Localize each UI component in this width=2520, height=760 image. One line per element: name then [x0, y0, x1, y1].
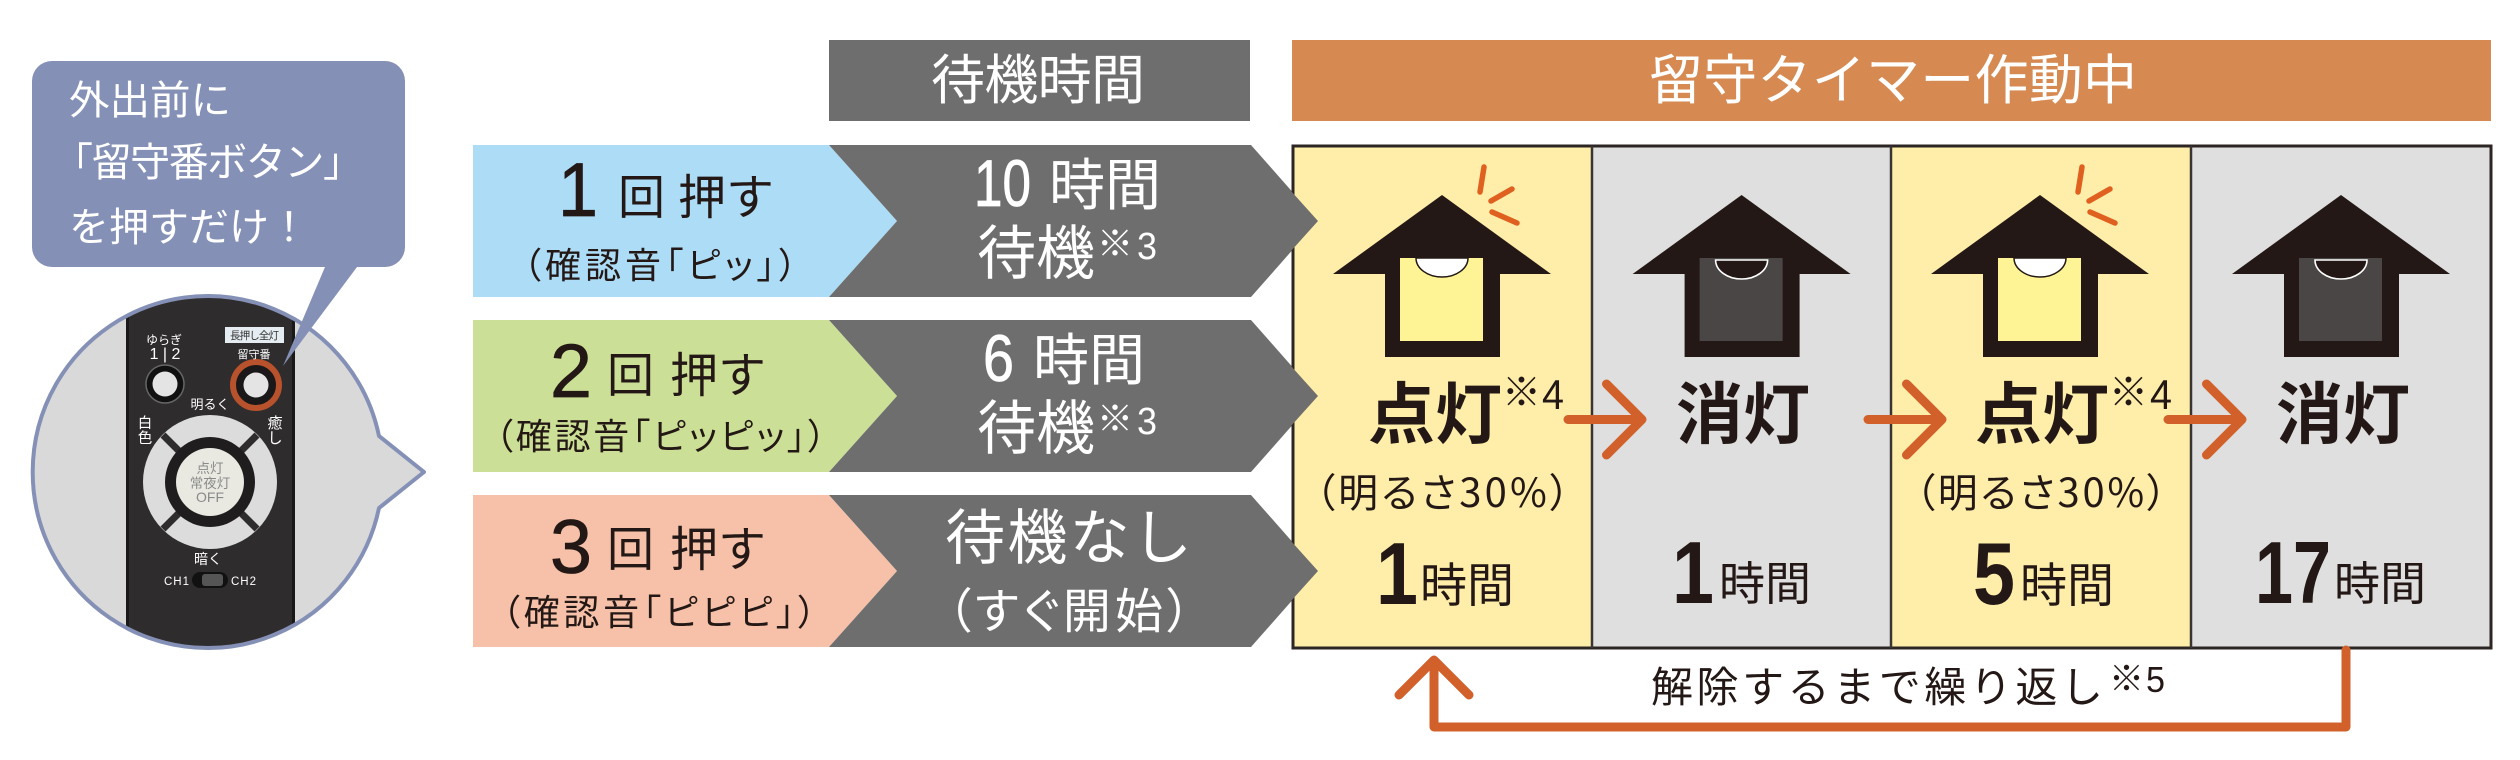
- step 4: light off 17 hours: 時間: [2334, 548, 2426, 614]
- arrow: 10 hour standby: 3: [1137, 226, 1157, 268]
- row 2: press twice: 押す: [670, 336, 766, 406]
- header: standby time: [829, 36, 1250, 121]
- label: long-press tag: 長押し全灯: [230, 328, 280, 343]
- step 3: light on 5 hours: 5: [1973, 524, 2015, 623]
- icon: direction pad: OFF: [196, 489, 224, 505]
- remote control labels: CH2: [231, 576, 257, 588]
- header: standby time: 待機時間: [931, 36, 1145, 115]
- icon: direction pad: [143, 415, 277, 549]
- text: repeats until cancelled: 解除するまで繰り返し: [1651, 654, 2103, 715]
- arrow: 10 hour standby: 待機: [977, 206, 1095, 291]
- callout: press the away button: 外出前に: [69, 68, 231, 126]
- step 1: light on 1 hour: 4: [1542, 371, 1564, 418]
- icon: dark house: [1633, 195, 1851, 357]
- arrow: step 3 to 4: [2168, 384, 2242, 455]
- arrow: 6 hour standby: ※: [1097, 390, 1133, 442]
- remote control labels: し: [267, 427, 283, 448]
- icon: yuragi button: [146, 365, 184, 403]
- remote control labels: 白: [138, 412, 152, 433]
- step 4: light off 17 hours: 消灯: [2276, 361, 2410, 458]
- row 1: press once: 1: [558, 148, 598, 233]
- arrow: no standby: （すぐ開始）: [947, 572, 1191, 642]
- icon: lit house: [1931, 167, 2149, 357]
- callout: press the away button: 「留守番ボタン」: [53, 130, 363, 188]
- remote control: [126, 290, 295, 655]
- step 2: light off 1 hour: 1: [1672, 523, 1714, 622]
- callout: press the away button: を押すだけ！: [69, 195, 309, 253]
- remote control labels: 癒: [267, 412, 283, 433]
- step 2: light off 1 hour: [1633, 195, 1851, 622]
- step 1: light on 1 hour: [1315, 167, 1570, 623]
- remote control labels: ゆらぎ: [146, 331, 182, 348]
- row 2: press twice: [473, 320, 897, 472]
- header: timer running: 留守タイマー作動中: [1649, 36, 2137, 115]
- header: timer running: [1292, 36, 2491, 121]
- arrow: 10 hour standby: 時間: [1049, 141, 1161, 222]
- step 1: light on 1 hour: 1: [1376, 524, 1418, 623]
- step 2: light off 1 hour: 時間: [1719, 548, 1811, 614]
- row 3: press three times: 押す: [670, 510, 766, 580]
- row 3: press three times: （確認音「ピピピ」）: [502, 584, 816, 636]
- remote control labels: 明るく: [190, 394, 230, 413]
- step 1: light on 1 hour: 点灯: [1368, 361, 1502, 458]
- arrow: 10 hour standby: [829, 141, 1318, 297]
- step 3: light on 5 hours: （明るさ30%）: [1915, 461, 2167, 519]
- step 3: light on 5 hours: [1915, 167, 2172, 623]
- row 1: press once: （確認音「ピッ」）: [523, 237, 797, 289]
- arrow: no standby: [829, 490, 1318, 647]
- arrow: 10 hour standby: ※: [1097, 215, 1133, 267]
- icon: dark house: [2232, 195, 2450, 357]
- step 2: light off 1 hour: 消灯: [1676, 361, 1810, 458]
- step 3: light on 5 hours: ※: [2109, 362, 2148, 418]
- arrow: step 1 to 2: [1568, 384, 1642, 455]
- row 3: press three times: 回: [607, 511, 654, 580]
- arrow: 6 hour standby: 時間: [1033, 316, 1145, 397]
- step 4: light off 17 hours: [2232, 195, 2450, 622]
- remote control zoom bubble: [33, 290, 424, 655]
- arrow: 6 hour standby: [829, 316, 1318, 472]
- row 1: press once: 押す: [678, 158, 774, 228]
- icon: channel slider: [192, 572, 228, 588]
- arrow: no standby: 待機なし: [945, 490, 1192, 577]
- row 3: press three times: [473, 495, 897, 647]
- icon: direction pad: 点灯: [196, 457, 224, 477]
- row 2: press twice: （確認音「ピッピッ」）: [495, 408, 826, 460]
- arrow: repeat loop: [1399, 650, 2346, 727]
- remote control labels: [138, 331, 283, 588]
- text: repeats until cancelled: 5: [2146, 659, 2165, 700]
- step 1: light on 1 hour: ※: [1502, 362, 1541, 418]
- step 3: light on 5 hours: 時間: [2020, 547, 2114, 616]
- icon: away button with red ring: [233, 362, 279, 408]
- row 1: press once: 回: [618, 159, 665, 228]
- icon: lit house: [1333, 167, 1551, 357]
- step 4: light off 17 hours: 17: [2255, 523, 2331, 622]
- remote control labels: 留守番: [238, 346, 270, 362]
- arrow: 6 hour standby: 3: [1137, 401, 1157, 443]
- arrow: step 2 to 3: [1868, 384, 1942, 455]
- text: repeats until cancelled: ※: [2109, 651, 2144, 702]
- step 1: light on 1 hour: 時間: [1420, 547, 1514, 616]
- arrow: 6 hour standby: 待機: [977, 381, 1095, 466]
- row 1: press once: [473, 145, 897, 297]
- arrow: 6 hour standby: 6: [983, 321, 1014, 395]
- remote control labels: 1 | 2: [150, 346, 181, 363]
- step 3: light on 5 hours: 4: [2150, 371, 2172, 418]
- icon: direction pad: 常夜灯: [190, 472, 230, 492]
- step 3: light on 5 hours: 点灯: [1975, 361, 2109, 458]
- panel: timer cycle: [1293, 146, 2491, 648]
- step 1: light on 1 hour: （明るさ30%）: [1315, 461, 1570, 519]
- remote control labels: 暗く: [194, 549, 222, 569]
- arrow: 10 hour standby: 10: [974, 146, 1031, 220]
- remote control labels: 色: [138, 427, 152, 448]
- row 2: press twice: 2: [550, 329, 592, 414]
- arrow tips over panel: [1291, 191, 1318, 601]
- callout: press the away button: [32, 61, 405, 366]
- remote control labels: CH1: [164, 576, 190, 588]
- row 2: press twice: 回: [607, 337, 654, 406]
- row 3: press three times: 3: [550, 505, 592, 590]
